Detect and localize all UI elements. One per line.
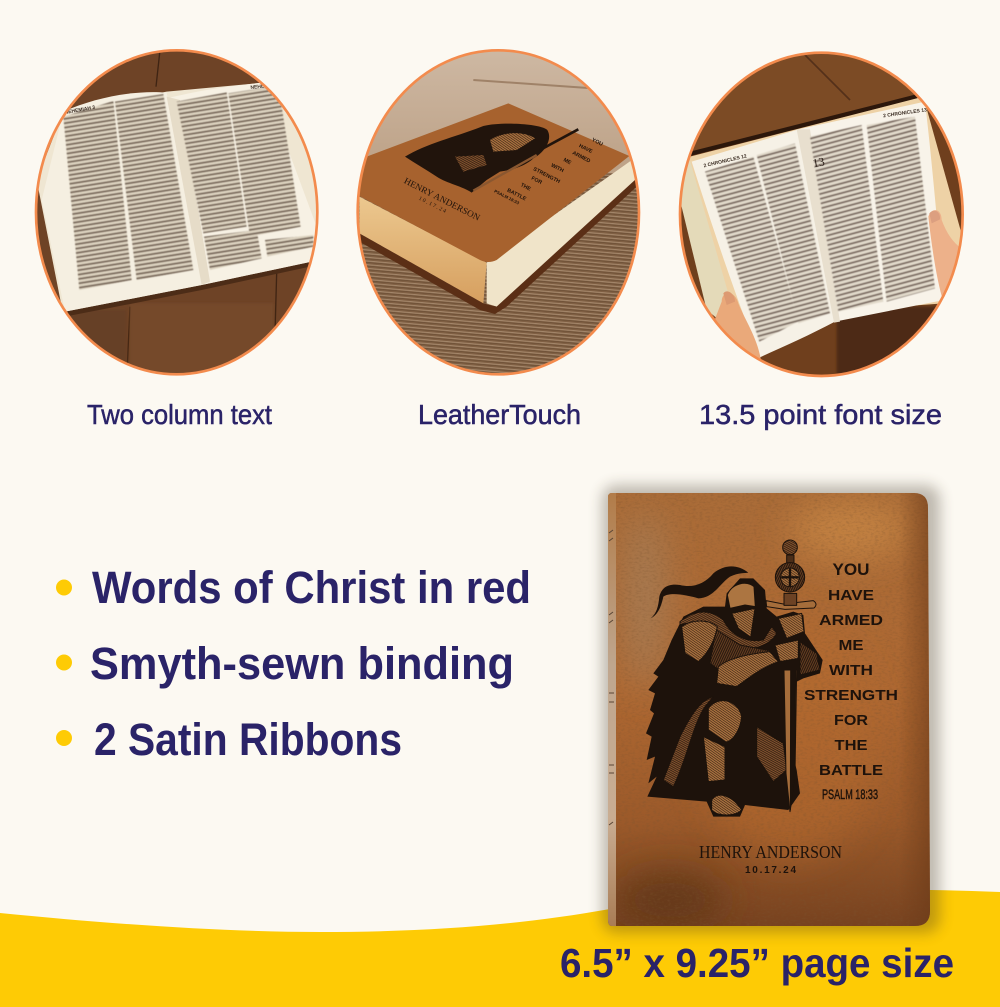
engraved verse: ARMED	[819, 612, 883, 629]
caption: two column text: Two column text	[87, 399, 272, 430]
engraved date: 10.17.24	[745, 865, 796, 876]
feature: binding: Smyth-sewn binding	[90, 638, 514, 689]
engraved verse: WITH	[829, 662, 873, 679]
bullet 3	[56, 730, 72, 746]
spine edge	[608, 493, 616, 927]
shoulder	[682, 621, 717, 662]
cowl	[680, 612, 777, 649]
engraved verse: PSALM 18:33	[822, 786, 878, 802]
helmet	[727, 583, 755, 608]
back cover	[359, 178, 637, 314]
engraved verse: ME	[838, 637, 864, 654]
knight illustration	[646, 540, 823, 817]
photo circle: leather book at an angle: 10.17.24	[417, 196, 447, 215]
engraved verse: STRENGTH	[804, 687, 898, 704]
armored body and cape silhouette	[646, 578, 823, 817]
chest	[710, 630, 770, 673]
engraved verse: STRENGTH	[532, 166, 561, 185]
engraved verse: ME	[562, 157, 572, 166]
engraved verse: YOU	[591, 137, 604, 148]
engraved verse: PSALM 18:33	[493, 189, 521, 206]
engraved verse	[493, 137, 604, 206]
engraved verse: FOR	[530, 176, 543, 186]
tabard	[757, 727, 787, 782]
bullet 1	[56, 580, 72, 596]
engraved verse: YOU	[832, 560, 870, 579]
engraved name: HENRY ANDERSON	[402, 176, 482, 223]
right page	[798, 102, 944, 322]
engraved name: HENRY ANDERSON	[699, 842, 842, 862]
knee	[708, 701, 742, 742]
photo circle: open Bible two column text: NEHEMIAH	[250, 82, 278, 91]
photo circle: leather book at an angle	[356, 49, 640, 376]
page edge, gilt side	[359, 197, 487, 303]
arm	[717, 652, 778, 687]
back shadow edge	[690, 93, 922, 156]
cover edge	[65, 262, 312, 317]
book shadow	[602, 485, 940, 933]
shin	[703, 737, 725, 782]
text columns	[63, 86, 313, 290]
yellow wave band	[0, 889, 1000, 1007]
caption: LeatherTouch: LeatherTouch	[418, 399, 581, 430]
engraved verse	[804, 560, 898, 802]
page edge, cream side	[487, 157, 637, 307]
page size label: 6.5” x 9.25” page size	[560, 940, 954, 986]
engraved verse: BATTLE	[506, 188, 527, 203]
left page	[42, 92, 202, 312]
engraved verse: ARMED	[571, 150, 591, 165]
photo circle: hands holding Bible: 2 CHRONICLES 12	[703, 153, 748, 169]
engraved verse: HAVE	[578, 143, 594, 155]
engraved knight	[405, 124, 578, 193]
boot	[712, 795, 742, 815]
engraved verse: BATTLE	[819, 762, 883, 779]
right page	[167, 83, 317, 285]
engraved verse: WITH	[550, 163, 565, 174]
caption: font size: 13.5 point font size	[699, 399, 942, 430]
photo circle: hands holding Bible	[678, 51, 964, 378]
page block and right edge	[37, 83, 323, 315]
engraved verse: THE	[519, 182, 532, 193]
photo circle: hands holding Bible: 2 CHRONICLES 13	[883, 107, 927, 119]
right hand	[928, 210, 958, 296]
sword	[766, 540, 816, 812]
feature list	[56, 562, 531, 765]
engraved verse: HAVE	[828, 587, 874, 604]
feature: words of Christ: Words of Christ in red	[92, 562, 531, 613]
engraved verse: FOR	[834, 712, 868, 729]
left page	[692, 129, 835, 357]
photo circle: open Bible two column text: NEHEMIAH 3	[64, 105, 96, 116]
leather Bible cover	[608, 493, 931, 930]
cloth strip	[663, 697, 713, 787]
feature: ribbons: 2 Satin Ribbons	[94, 714, 402, 765]
engraved verse: THE	[834, 737, 868, 754]
text columns	[705, 117, 935, 342]
left hand	[715, 294, 761, 359]
far forearm	[800, 642, 820, 675]
photo circle: open Bible two column text	[30, 40, 330, 380]
bullet 2	[56, 654, 72, 670]
photo circle: hands holding Bible: 13	[811, 154, 826, 170]
side page blocks	[683, 97, 963, 320]
gripping hands	[778, 613, 804, 638]
plume	[651, 566, 748, 618]
leather cover	[359, 103, 629, 262]
